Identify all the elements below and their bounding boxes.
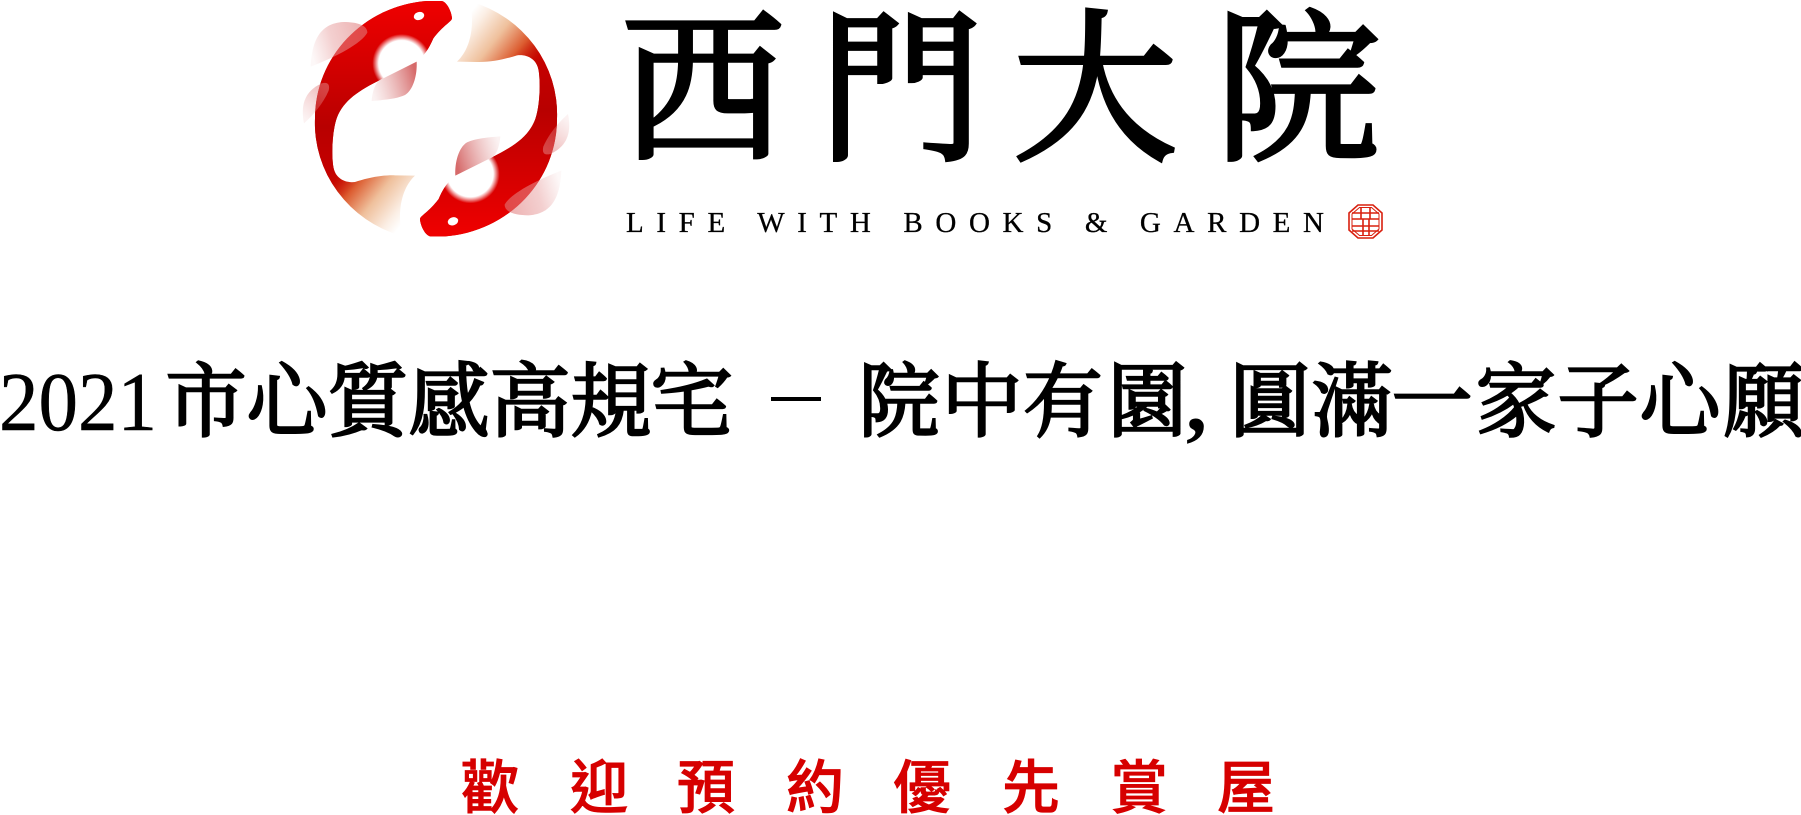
heading: first phrase: 市心質感高規宅 <box>165 358 733 448</box>
logo: koi circle emblem <box>303 1 569 236</box>
heading: dash <box>771 397 821 401</box>
tagline: LIFE WITH BOOKS & GARDEN <box>626 207 1324 239</box>
koi fish: upper left <box>303 1 452 236</box>
heading: third phrase: 圓滿一家子心願 <box>1229 358 1801 448</box>
koi fish: lower right <box>420 1 569 236</box>
heading: second phrase: 院中有園 <box>858 358 1188 448</box>
icon: red seal <box>1349 205 1382 238</box>
heading: year: 2021 <box>0 356 157 449</box>
heading: comma: , <box>1186 357 1207 450</box>
brand name title: 西門大院 <box>621 2 1380 183</box>
